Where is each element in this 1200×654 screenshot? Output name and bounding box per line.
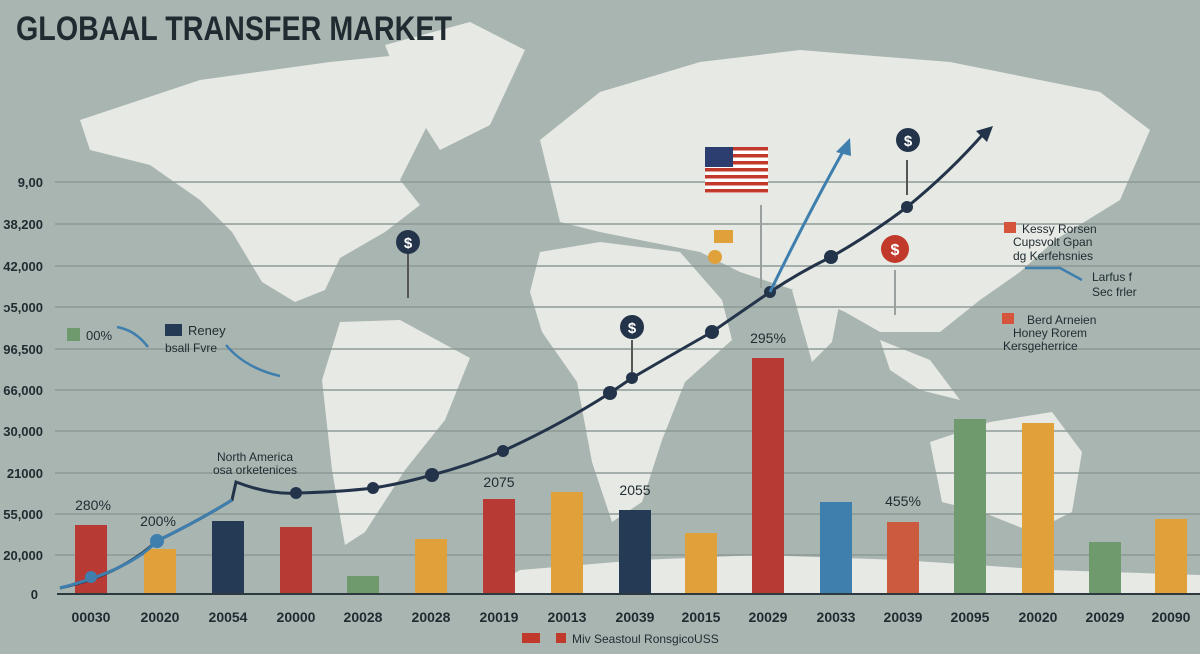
right legend <box>1002 222 1137 353</box>
y axis labels: 38,200 <box>3 217 43 232</box>
x axis labels: 00030 <box>72 609 111 625</box>
US flag <box>705 147 768 193</box>
y axis labels: 55,000 <box>3 507 43 522</box>
left legend <box>67 323 297 477</box>
x axis labels: 20015 <box>682 609 721 625</box>
bottom legend: Miv Seastoul RonsgicoUSS <box>572 632 719 646</box>
pins: $ <box>404 235 413 252</box>
bars <box>75 358 1187 594</box>
y axis labels: 20,000 <box>3 548 43 563</box>
x axis labels: 20029 <box>1086 609 1125 625</box>
left legend: bsall Fvre <box>165 341 217 355</box>
x axis labels: 20020 <box>1019 609 1058 625</box>
x axis <box>57 593 1200 595</box>
x axis labels: 20019 <box>480 609 519 625</box>
y axis labels <box>3 175 43 602</box>
pins: $ <box>628 320 637 337</box>
growth curve <box>60 126 993 588</box>
y axis labels: 0 <box>31 587 38 602</box>
x axis labels: 20090 <box>1152 609 1191 625</box>
x axis labels <box>72 609 1191 625</box>
bar value labels: 455% <box>885 493 921 509</box>
bar value labels: 2075 <box>483 474 515 490</box>
right legend: Sec frler <box>1092 285 1137 299</box>
left legend: North America <box>217 450 293 464</box>
right legend: dg Kerfehsnies <box>1013 249 1093 263</box>
y axis labels: 96,500 <box>3 342 43 357</box>
bar value labels: 200% <box>140 513 176 529</box>
x axis labels: 20020 <box>141 609 180 625</box>
pins: $ <box>891 242 900 259</box>
y axis labels: 21000 <box>7 466 43 481</box>
x axis labels: 20033 <box>817 609 856 625</box>
x axis labels: 20095 <box>951 609 990 625</box>
x axis labels: 20039 <box>884 609 923 625</box>
y axis labels: 30,000 <box>3 424 43 439</box>
right legend: Larfus f <box>1092 270 1133 284</box>
left legend: Reney <box>188 323 226 338</box>
bar value labels: 280% <box>75 497 111 513</box>
right legend: Kersgeherrice <box>1003 339 1078 353</box>
x axis labels: 20013 <box>548 609 587 625</box>
y axis labels: ↄ5,000 <box>3 300 43 315</box>
x axis labels: 20039 <box>616 609 655 625</box>
bar value labels <box>75 330 921 529</box>
right legend: Cupsvolt Gpan <box>1013 235 1092 249</box>
left legend: osa orketenices <box>213 463 297 477</box>
title: GLOBAAL TRANSFER MARKET <box>16 10 452 48</box>
bar value labels: 295% <box>750 330 786 346</box>
y axis labels: 42,000 <box>3 259 43 274</box>
y axis labels: 9,00 <box>18 175 43 190</box>
pins: $ <box>904 133 913 150</box>
right legend: Berd Arneien <box>1027 313 1096 327</box>
x axis labels: 20028 <box>412 609 451 625</box>
x axis labels: 20000 <box>277 609 316 625</box>
y axis labels: 66,000 <box>3 383 43 398</box>
grid lines <box>55 182 1200 555</box>
x axis labels: 20029 <box>749 609 788 625</box>
pins <box>396 128 920 372</box>
bar value labels: 2055 <box>619 482 651 498</box>
x axis labels: 20054 <box>209 609 248 625</box>
left legend: 00% <box>86 328 112 343</box>
blue arrow <box>770 138 851 292</box>
right legend: Kessy Rorsen <box>1022 222 1097 236</box>
x axis labels: 20028 <box>344 609 383 625</box>
right legend: Honey Rorem <box>1013 326 1087 340</box>
